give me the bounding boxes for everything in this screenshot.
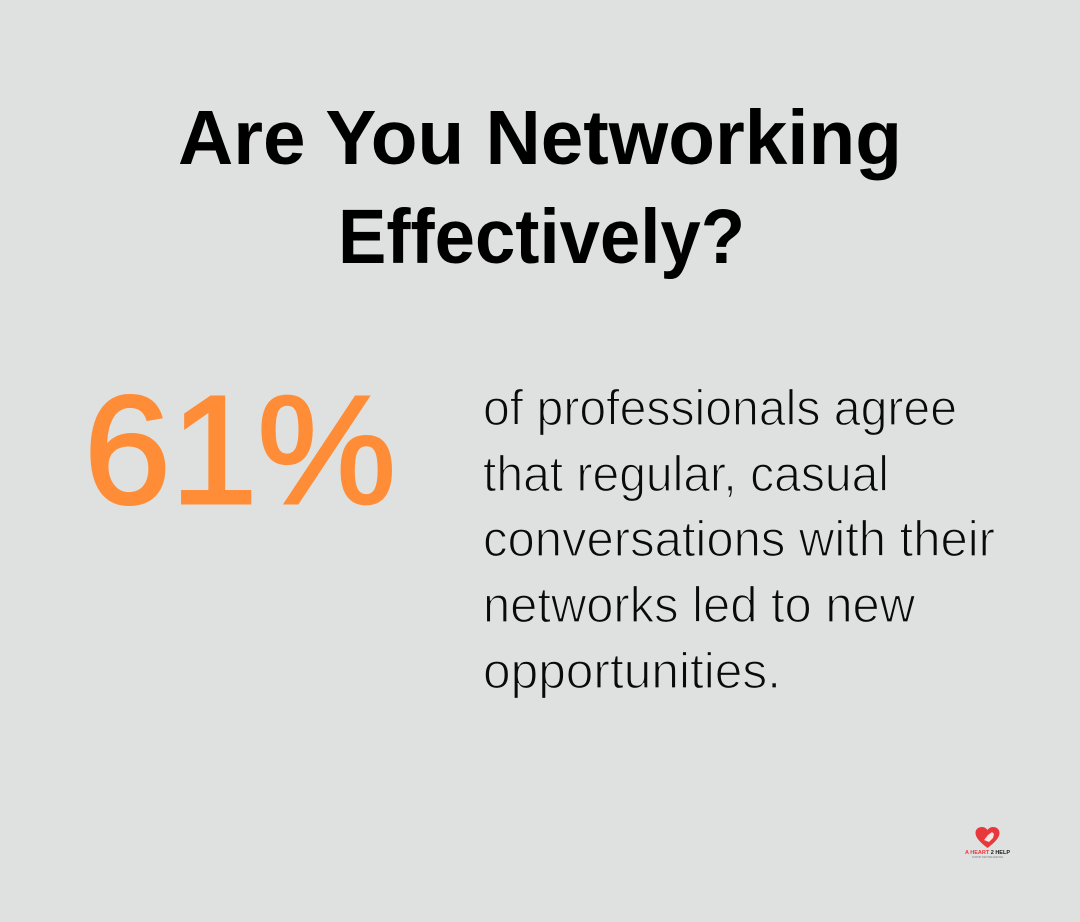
title: Effectively? <box>338 194 745 280</box>
title <box>178 95 902 280</box>
description text: that regular, casual <box>483 446 889 502</box>
description text: conversations with their <box>483 511 995 567</box>
title: Are You Networking <box>178 95 902 181</box>
description text <box>483 380 995 699</box>
statistic: 61%: 61% <box>84 364 396 536</box>
logo: A Heart 2 Help <box>965 827 1010 859</box>
icon: heart with hands <box>976 827 1000 848</box>
logo wordmark: A HEART 2 HELP <box>965 850 1010 856</box>
description text: networks led to new <box>483 577 916 633</box>
description text: of professionals agree <box>483 380 957 436</box>
description text: opportunities. <box>483 643 781 699</box>
logo tagline: SUPPORT AND HOME SERVICES <box>972 856 1003 859</box>
